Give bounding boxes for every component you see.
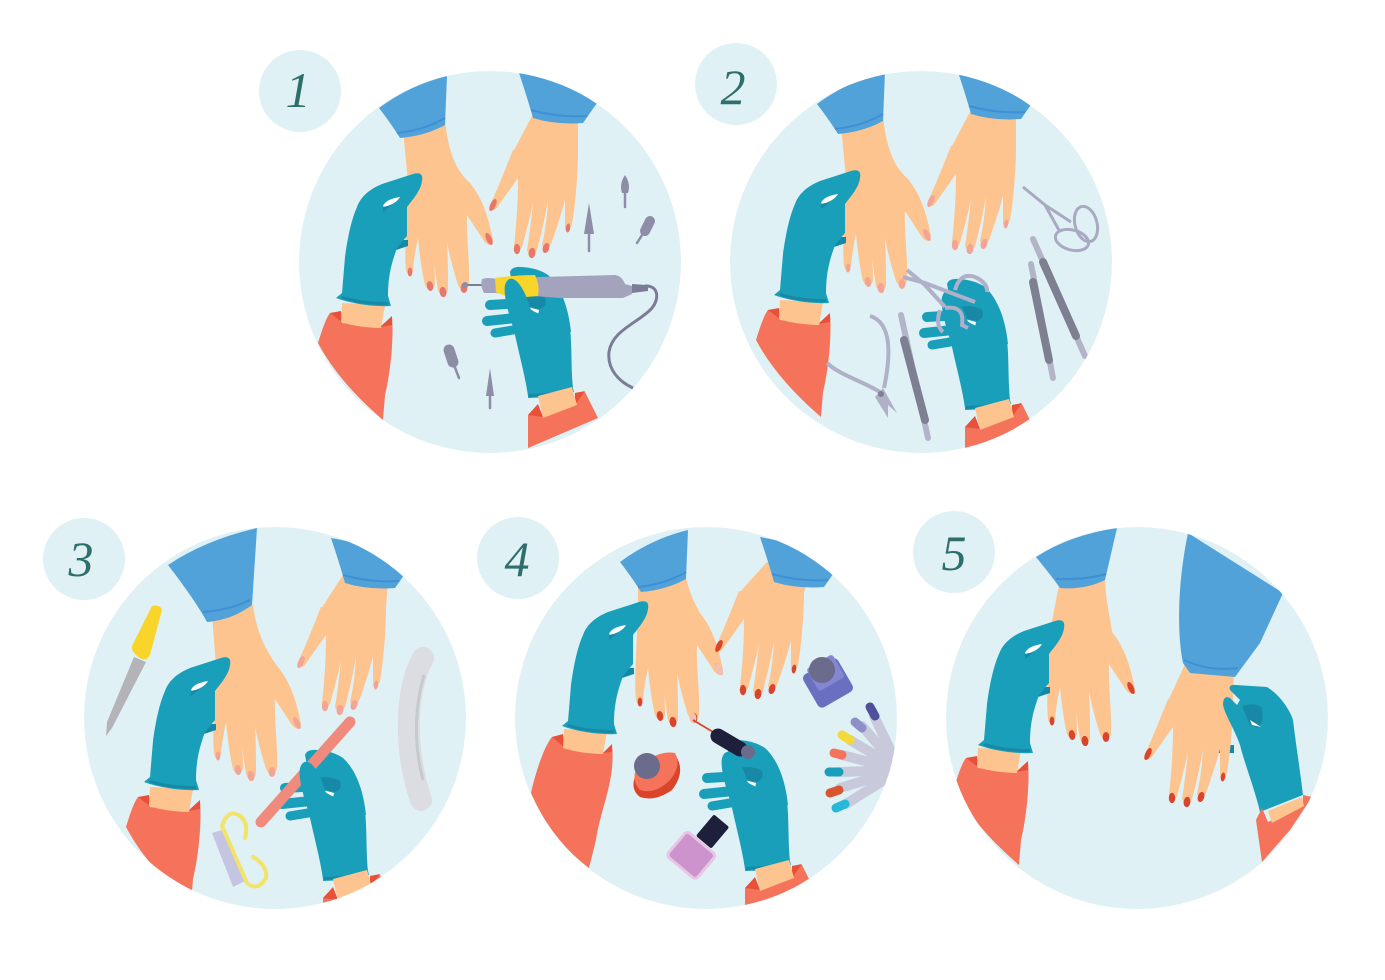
number badge 4: 4 [504, 531, 530, 587]
number badge 3: 3 [68, 531, 94, 587]
number badge 5: 5 [942, 525, 966, 581]
master right glove with polish brush [692, 719, 809, 905]
curved scissors [1023, 187, 1101, 254]
master left glove and long sleeve [531, 601, 648, 868]
master left glove [126, 657, 230, 904]
pink polish bottle [666, 815, 728, 880]
master right glove with cuticle scissors [903, 270, 1035, 460]
number badge 2 [695, 43, 777, 125]
white buffer block [409, 658, 424, 800]
master right glove with pink file [256, 716, 381, 903]
drill bits [449, 175, 650, 408]
purple bottle cap [809, 657, 835, 683]
panel 5: finished nails [946, 527, 1328, 909]
panel 4: polish application [515, 527, 900, 921]
panel 1: electric drill removal [299, 71, 681, 453]
panel 3: nail filing [84, 527, 466, 931]
panel 2: cuticle tools [730, 69, 1112, 460]
number badge 1: 1 [286, 62, 310, 118]
master left glove [318, 173, 422, 420]
double-ended pushers [901, 239, 1085, 438]
number badge 1 [259, 50, 341, 132]
client hands and sleeves [168, 528, 409, 782]
number badge 2: 2 [720, 59, 746, 115]
number badge 4 [477, 517, 559, 599]
client hands and sleeves [817, 69, 1035, 294]
client hands and sleeves [379, 73, 597, 298]
master left glove [756, 170, 860, 417]
number badge 3 [43, 518, 125, 600]
number badge 5 [913, 511, 995, 593]
client hands and sleeves [620, 530, 838, 728]
master right wrist [1268, 797, 1304, 823]
long blue sleeve [1179, 533, 1283, 677]
master right glove fingers behind hand [1217, 745, 1234, 753]
yellow-handled metal file [106, 606, 162, 736]
drill cord [609, 286, 657, 388]
red polish bottle [633, 752, 680, 798]
master right glove over hand [1223, 685, 1303, 812]
client hands and sleeves [1036, 528, 1234, 808]
cuticle nippers [827, 316, 897, 418]
purple polish bottle [803, 655, 853, 708]
master right arm [1256, 795, 1312, 862]
master right glove with drill [462, 267, 648, 448]
nail brush [212, 814, 266, 887]
master left glove [954, 620, 1064, 865]
colour swatch fan [829, 707, 900, 808]
